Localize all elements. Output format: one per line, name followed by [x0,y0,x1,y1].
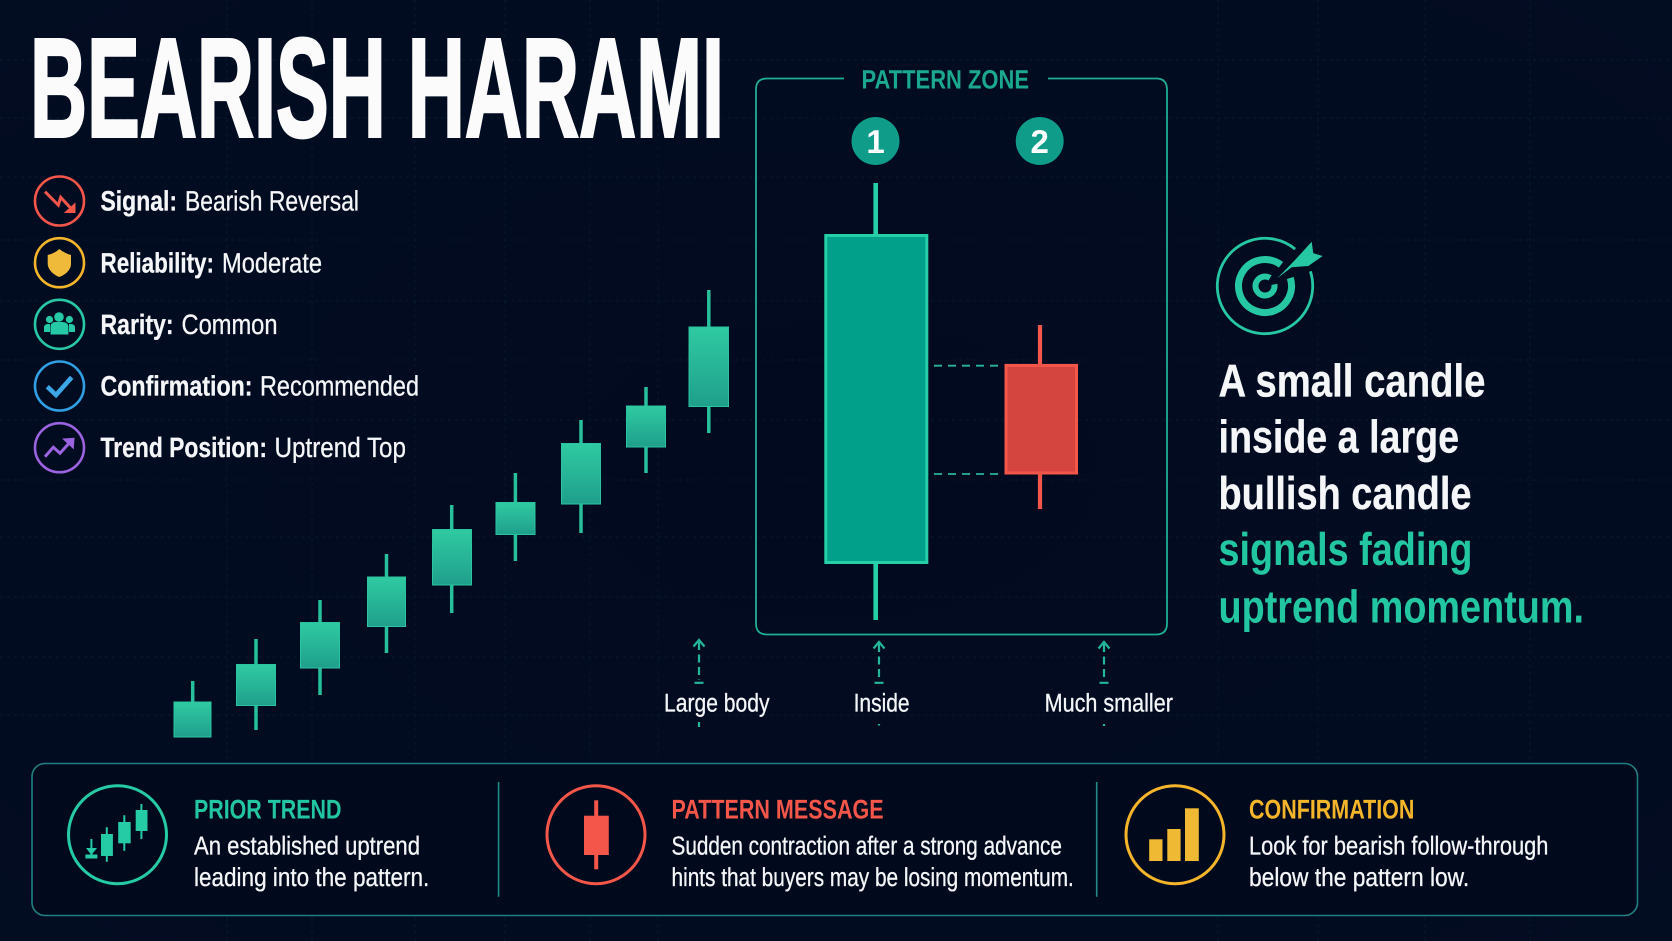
badge 1: 1 [866,123,885,160]
row: confirmation [35,362,419,410]
section: confirmation [1126,786,1548,892]
badge 2: 2 [1031,123,1049,160]
text block: key takeaway: uptrend momentum. [1218,580,1584,632]
section: pattern message: Sudden contraction after a strong advance [672,830,1062,860]
icon: people [35,300,84,349]
icon: shield [35,238,84,287]
row: signal: Bearish Reversal [185,186,359,216]
section: prior trend: An established uptrend [194,830,420,860]
badge 1 [852,117,900,165]
row: rarity: Rarity: [100,309,174,340]
icon: rising candles [68,786,166,884]
info list [35,176,419,472]
annotation: inside [854,642,910,726]
row: trend position: Trend Position: [100,432,267,463]
text block: key takeaway: bullish candle [1218,467,1472,519]
row: reliability: Reliability: [100,248,214,278]
arrow [874,642,884,726]
badge 2 [1016,117,1064,165]
row: rarity: Common [182,309,278,340]
icon: red candle [547,786,645,884]
title: BEARISH HARAMI [30,8,724,166]
section: prior trend [68,786,429,892]
row: signal: Signal: [100,186,177,216]
row: reliability [35,238,322,287]
section: pattern message: hints that buyers may be losing momentum. [672,862,1074,892]
arrow [694,640,704,727]
icon: falling arrow [35,176,84,226]
row: confirmation: Confirmation: [100,370,252,402]
row: reliability: Moderate [222,248,322,278]
row: rarity [35,300,278,349]
text block: key takeaway: signals fading [1218,523,1472,575]
dashed connectors [934,366,1000,474]
candle 2: small bearish [1006,325,1076,509]
annotation: large body: Large body [664,690,770,718]
icon: bar chart [1126,786,1224,884]
row: trend position [35,423,406,472]
section: confirmation: below the pattern low. [1249,862,1469,892]
section: confirmation: Look for bearish follow-through [1249,830,1548,860]
heading: pattern zone: PATTERN ZONE [862,64,1029,94]
panel: summary strip [32,764,1638,916]
row: confirmation: Recommended [260,370,419,402]
text block: key takeaway: A small candle [1218,355,1486,407]
panel: pattern zone [756,64,1167,635]
chart: rising candlesticks [174,290,728,737]
icon: rising trend [35,423,84,472]
candle 1: large bullish [826,183,927,620]
section: pattern message [547,786,1074,892]
icon: target with dart [1205,226,1325,346]
arrow [1098,642,1110,726]
annotation: much smaller: Much smaller [1045,690,1173,718]
row: signal [35,176,359,226]
section: prior trend: PRIOR TREND [194,794,341,824]
annotation: inside: Inside [854,690,910,718]
icon: check mark [35,362,84,410]
annotation: large body [664,640,770,727]
annotation: much smaller [1045,642,1173,726]
text block: key takeaway: inside a large [1218,410,1459,462]
text block: key takeaway [1218,355,1584,632]
section: prior trend: leading into the pattern. [194,862,429,892]
row: trend position: Uptrend Top [274,432,406,463]
section: pattern message: PATTERN MESSAGE [672,794,884,824]
section: confirmation: CONFIRMATION [1249,794,1414,824]
